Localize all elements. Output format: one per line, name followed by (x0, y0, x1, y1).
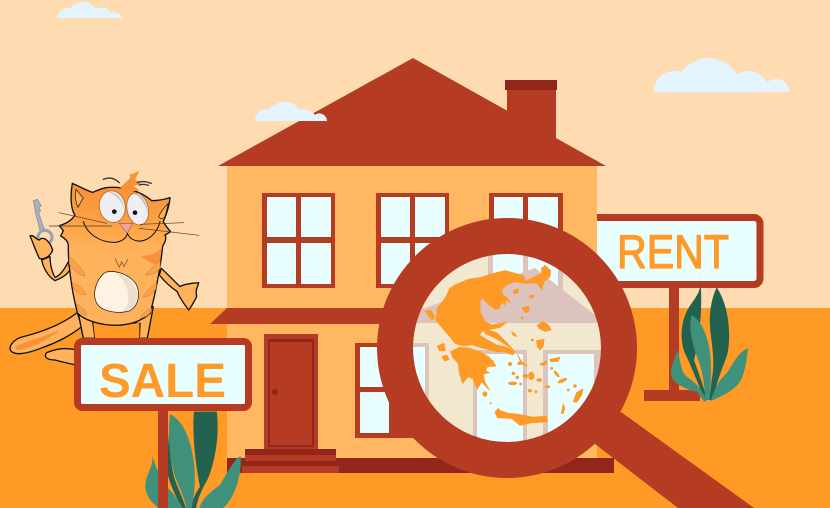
nose (119, 223, 133, 233)
magnifier handle (590, 412, 754, 508)
roof (218, 58, 606, 166)
ground gap between the legs (93, 323, 139, 338)
sale label: SALE (99, 355, 226, 408)
sale post (158, 408, 168, 508)
cat with key (10, 171, 199, 365)
house wall (227, 160, 597, 462)
eyebrows (103, 178, 151, 185)
darker fur shading (141, 247, 162, 266)
sky background (0, 0, 830, 308)
sale plant (145, 412, 241, 508)
foundation band (227, 458, 614, 473)
upper window left (262, 193, 335, 288)
house (210, 58, 614, 473)
key (33, 199, 52, 244)
magnifying glass (395, 236, 754, 508)
lower window (355, 343, 428, 438)
chest tuft (115, 259, 128, 267)
tail (10, 313, 82, 354)
Ionian and Aegean islands (425, 289, 583, 413)
rent post (644, 285, 700, 401)
rent sign (590, 218, 760, 401)
left arm holding key (42, 257, 70, 281)
rent board (590, 218, 760, 284)
eyes (97, 189, 151, 227)
upper window middle (376, 193, 449, 288)
Peloponnese (451, 347, 496, 390)
Euboea (485, 329, 513, 350)
right arm and hand (159, 268, 199, 310)
door (264, 334, 318, 450)
rent label: RENT (617, 225, 729, 278)
front steps (242, 449, 339, 473)
legs (78, 307, 153, 338)
clouds (57, 2, 790, 121)
porch awning (210, 308, 400, 324)
lens contents: faded house (413, 254, 601, 442)
hand (30, 236, 53, 259)
upper window right (489, 193, 563, 288)
ear inners (76, 189, 83, 207)
hind paw (45, 349, 77, 365)
magnifier ring (395, 236, 619, 460)
fur stripes (69, 257, 160, 318)
hair tuft (120, 171, 142, 192)
mainland (436, 265, 551, 355)
Crete (495, 408, 547, 425)
sale board (78, 342, 248, 408)
head and body silhouette (59, 183, 171, 325)
belly patch (95, 272, 139, 312)
map of Greece (425, 265, 583, 425)
smile (83, 222, 160, 242)
chimney (505, 80, 557, 155)
ground (0, 308, 830, 508)
whiskers (49, 213, 199, 235)
rent plant (671, 275, 748, 401)
sale sign (78, 342, 248, 508)
